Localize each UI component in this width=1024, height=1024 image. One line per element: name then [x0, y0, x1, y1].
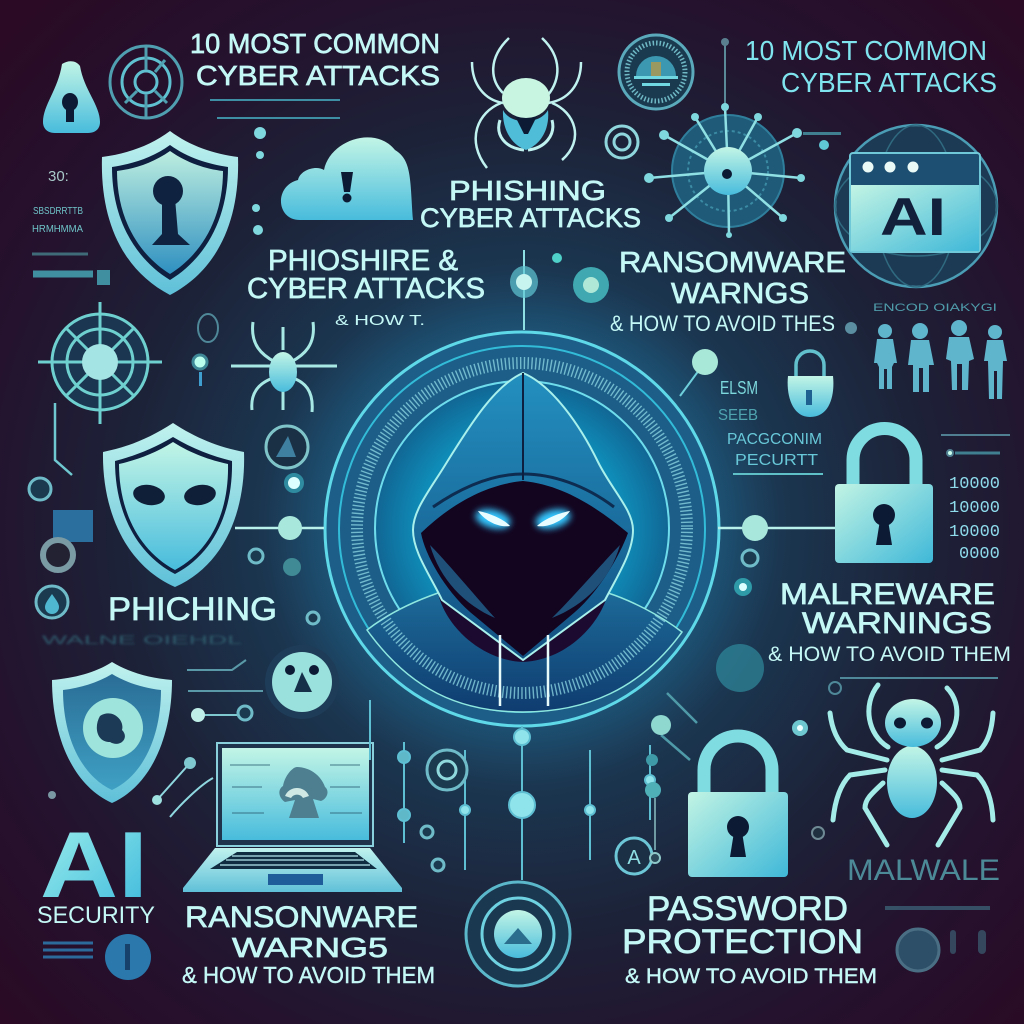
text block: ransomware warnings bottom: & HOW TO AVOID THEM	[182, 962, 435, 988]
text block: ransomware warnings: WARNGS	[671, 278, 809, 310]
decorative top small line text: ENCOD OIAKYGI	[873, 302, 997, 314]
title: right: 10 MOST COMMON	[745, 35, 987, 66]
text block: phishware cyber attacks: & HOW T.	[335, 312, 425, 329]
text block: phishware cyber attacks	[247, 245, 485, 329]
lines left of face	[187, 660, 263, 691]
small text left	[32, 168, 110, 285]
title: right	[745, 35, 997, 98]
icon: AI browser window	[835, 125, 997, 287]
decorative line above spider	[829, 678, 998, 694]
text block: phishware cyber attacks: PHIOSHIRE &	[268, 245, 458, 277]
icon: face circle	[265, 645, 339, 719]
icon: laptop	[183, 743, 402, 892]
title: left	[190, 28, 440, 91]
text block: ransomware warnings bottom: WARNG5	[232, 932, 388, 963]
icon: bottom target	[466, 882, 570, 986]
text block: malware warnings: MALREWARE	[780, 578, 995, 611]
text block: ransomware warnings: & HOW TO AVOID THES	[610, 311, 835, 336]
node pair	[48, 706, 252, 817]
faded blur text: WALNE OIEHDL	[42, 633, 243, 647]
icon: phishing mask shield	[103, 423, 244, 587]
icon: triangle ring	[266, 426, 308, 491]
small text: password security: SEEB	[718, 407, 758, 424]
icon: padlock bell	[43, 61, 100, 133]
text block: phishware cyber attacks: CYBER ATTACKS	[247, 273, 485, 305]
label: malwale: MALWALE	[847, 854, 1000, 887]
connector: right node	[718, 515, 836, 541]
small text: password security: ELSM	[720, 378, 758, 398]
title: right: CYBER ATTACKS	[781, 67, 997, 98]
title: left: 10 MOST COMMON	[190, 28, 440, 59]
icon: cloud with warning	[281, 137, 413, 220]
small dots under title	[252, 127, 266, 235]
text block: AI security: SECURITY	[37, 902, 155, 929]
icon: A ring: A	[627, 847, 641, 869]
icon: fingerprint	[193, 314, 218, 386]
text block: password protection: PASSWORD	[647, 890, 848, 928]
decorative lines above binary	[941, 435, 1010, 456]
small text left: 30:	[48, 168, 69, 185]
icon: emblem	[619, 35, 693, 109]
icon: people group	[874, 320, 1007, 399]
icon: wheel	[38, 302, 162, 475]
small text: password security	[718, 378, 823, 474]
text block: ransomware warnings bottom	[182, 901, 435, 988]
binary text	[949, 475, 1000, 564]
icon: large spider	[830, 685, 993, 845]
faded widgets	[885, 906, 990, 971]
text block: password protection: PROTECTION	[622, 923, 863, 961]
small shield bottom-left	[52, 662, 172, 803]
icon: ring near laptop	[421, 750, 467, 871]
binary text: 0000	[959, 545, 1000, 564]
icon: vertical pin	[721, 38, 729, 110]
icon: network node	[644, 103, 805, 238]
decorative lines under left title	[210, 100, 340, 118]
heading: phishing cyber attacks: PHISHING	[449, 175, 606, 206]
icon: AI browser window: AI	[880, 188, 946, 247]
text block: ransomware warnings	[610, 247, 846, 336]
hacker figure	[357, 363, 687, 712]
icon: rings	[606, 126, 638, 158]
icon: bottom padlock	[688, 736, 788, 877]
text block: AI security: AI	[40, 812, 148, 917]
icon: target	[110, 46, 182, 118]
connector nodes top	[510, 250, 609, 330]
small rings near disc	[249, 549, 758, 624]
binary text: 10000	[949, 523, 1000, 542]
heading: phishing cyber attacks: CYBER ATTACKS	[420, 203, 641, 233]
decorative marks near network	[803, 132, 841, 150]
title: left: CYBER ATTACKS	[196, 60, 440, 91]
text block: malware warnings: & HOW TO AVOID THEM	[768, 643, 1011, 666]
icon: A ring	[616, 838, 652, 874]
small nodes near bottom lock	[645, 644, 824, 863]
icon: small info circle	[43, 934, 151, 980]
small text: password security: PACGCONIM	[727, 431, 822, 448]
icon: large padlock	[835, 429, 933, 563]
small text: password security: PECURTT	[735, 452, 818, 469]
binary text: 10000	[949, 499, 1000, 518]
text block: ransomware warnings: RANSOMWARE	[619, 247, 846, 279]
text block: ransomware warnings bottom: RANSONWARE	[185, 901, 418, 934]
connector: left node	[235, 516, 324, 540]
small text left: HRMHMMA	[32, 224, 83, 235]
small text left: SBSDRRTTB	[33, 206, 83, 217]
text block: malware warnings	[768, 578, 1011, 666]
heading: phishing cyber attacks	[420, 175, 641, 233]
text block: password protection: & HOW TO AVOID THEM	[625, 965, 877, 988]
heading: phiching: PHICHING	[108, 591, 277, 627]
circuit lines bottom	[370, 700, 655, 880]
text block: malware warnings: WARNINGS	[802, 607, 992, 640]
icon: left rings column	[29, 478, 93, 618]
text block: password protection	[622, 890, 877, 988]
icon: small lock	[788, 351, 833, 417]
binary text: 10000	[949, 475, 1000, 494]
icon: small spider	[231, 322, 337, 412]
central disc	[325, 332, 719, 726]
icon: keyhole shield	[102, 131, 238, 295]
connector: small node	[680, 322, 857, 396]
icon: top spider	[472, 38, 581, 168]
